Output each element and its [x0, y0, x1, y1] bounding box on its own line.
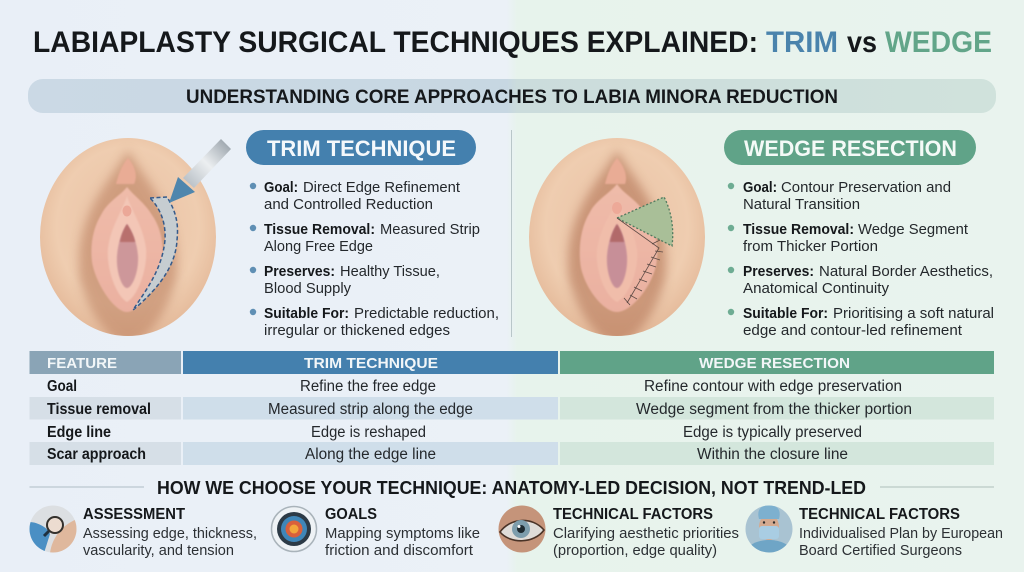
table header row: FEATURE	[47, 355, 117, 372]
factor: goals: Mapping symptoms like	[325, 526, 480, 542]
factor: technical factors (eye): Clarifying aesthetic priorities	[553, 526, 739, 542]
bullet: preserves: Preserves:	[264, 263, 335, 280]
panel: wedge resection heading	[724, 130, 976, 165]
panel: trim technique heading: TRIM TECHNIQUE	[267, 136, 456, 161]
section heading: how we choose: HOW WE CHOOSE YOUR TECHNIQUE: ANATOMY-LED DECISION, NOT TREND-LED	[157, 477, 866, 498]
factor: technical factors (surgeon): Individualised Plan by European	[799, 526, 1003, 542]
bullet: preserves	[728, 263, 993, 297]
table row: scar approach: Scar approach	[47, 446, 146, 463]
factor: assessment: ASSESSMENT	[83, 506, 185, 523]
factor: goals	[272, 506, 480, 559]
table row: edge line: Edge is typically preserved	[683, 424, 862, 441]
factor: technical factors (surgeon): Board Certified Surgeons	[799, 543, 962, 559]
bullet: preserves: Healthy Tissue,	[340, 263, 440, 280]
bullet: tissue removal	[728, 221, 969, 255]
bullet: preserves: Natural Border Aesthetics,	[819, 263, 993, 280]
table row: goal: Refine contour with edge preservation	[644, 378, 902, 395]
panel: trim technique heading	[246, 130, 476, 165]
text block: wedge resection bullets	[728, 179, 994, 339]
bullet: suitable for: Suitable For:	[743, 305, 828, 322]
table header row	[30, 351, 994, 374]
factor: assessment	[29, 506, 257, 559]
bullet: suitable for: Suitable For:	[264, 305, 349, 322]
bullet: preserves	[250, 263, 440, 297]
bullet: suitable for	[250, 305, 499, 339]
panel: wedge resection illustration	[529, 138, 705, 345]
table row: tissue removal	[30, 397, 994, 420]
bullet: goal: Natural Transition	[743, 196, 860, 213]
table row: edge line: Edge line	[47, 424, 111, 441]
bullet: goal	[250, 179, 461, 213]
table row: tissue removal: Wedge segment from the thicker portion	[636, 401, 912, 418]
bullet: tissue removal: Wedge Segment	[858, 221, 969, 238]
table row: scar approach	[30, 442, 994, 465]
panel: trim technique illustration	[40, 138, 231, 345]
bullet: preserves: Preserves:	[743, 263, 814, 280]
bullet: tissue removal: Tissue Removal:	[264, 221, 375, 238]
title: vs	[847, 26, 877, 59]
table row: goal	[47, 378, 902, 395]
factor: technical factors (eye): (proportion, edge quality)	[553, 543, 717, 559]
icon: magnifier and gloved hand	[29, 506, 80, 553]
wedge segment with dotted outline	[617, 197, 673, 246]
bullet: tissue removal	[250, 221, 480, 255]
factor: technical factors (eye)	[498, 504, 739, 559]
bullet: preserves: Anatomical Continuity	[743, 280, 889, 297]
subtitle banner	[28, 79, 996, 113]
text block: trim technique bullets	[250, 179, 499, 339]
bullet: goal: Direct Edge Refinement	[303, 179, 461, 196]
table row: goal: Refine the free edge	[300, 378, 436, 395]
bullet: suitable for	[728, 305, 994, 339]
table row: scar approach: Along the edge line	[305, 446, 436, 463]
table row: edge line: Edge is reshaped	[311, 424, 426, 441]
bullet: tissue removal: Measured Strip	[380, 221, 480, 238]
factor: technical factors (eye): TECHNICAL FACTORS	[553, 506, 713, 523]
table header row: WEDGE RESECTION	[699, 355, 850, 372]
bullet: goal: Contour Preservation and	[781, 179, 951, 196]
title: LABIAPLASTY SURGICAL TECHNIQUES EXPLAINED:	[33, 26, 758, 59]
comparison table	[30, 351, 994, 465]
table header row: TRIM TECHNIQUE	[304, 355, 438, 372]
table row: scar approach: Within the closure line	[697, 446, 848, 463]
icon: surgeon	[745, 505, 793, 553]
table row: tissue removal: Tissue removal	[47, 401, 151, 418]
table row: goal: Goal	[47, 378, 77, 395]
subtitle banner: UNDERSTANDING CORE APPROACHES TO LABIA MINORA REDUCTION	[186, 86, 838, 108]
factor: goals: GOALS	[325, 506, 377, 523]
icon: eye	[498, 504, 546, 552]
icon: surgical pen	[169, 139, 231, 203]
bullet: suitable for: irregular or thickened edges	[264, 322, 450, 339]
panel: wedge resection heading: WEDGE RESECTION	[744, 136, 957, 161]
factor: assessment: vascularity, and tension	[83, 543, 234, 559]
factor: goals: friction and discomfort	[325, 543, 473, 559]
title: TRIM	[766, 26, 838, 59]
table row: tissue removal: Measured strip along the edge	[268, 401, 473, 418]
factor: assessment: Assessing edge, thickness,	[83, 526, 257, 542]
bullet: preserves: Blood Supply	[264, 280, 351, 297]
factor: technical factors (surgeon)	[745, 505, 1003, 559]
trim strip with dashed outline	[133, 197, 178, 310]
table row: edge line	[47, 424, 862, 441]
bullet: suitable for: edge and contour-led refinement	[743, 322, 963, 339]
bullet: goal: and Controlled Reduction	[264, 196, 433, 213]
icon: target	[272, 506, 316, 552]
bullet: goal: Goal:	[743, 179, 777, 196]
bullet: suitable for: Prioritising a soft natural	[833, 305, 994, 322]
title: WEDGE	[885, 26, 992, 59]
bullet: goal: Goal:	[264, 179, 298, 196]
bullet: suitable for: Predictable reduction,	[354, 305, 499, 322]
bullet: tissue removal: Along Free Edge	[264, 238, 373, 255]
bullet: tissue removal: from Thicker Portion	[743, 238, 878, 255]
bullet: goal	[728, 179, 951, 213]
bullet: tissue removal: Tissue Removal:	[743, 221, 854, 238]
closure line sutures	[617, 218, 663, 305]
factor: technical factors (surgeon): TECHNICAL FACTORS	[799, 506, 960, 523]
